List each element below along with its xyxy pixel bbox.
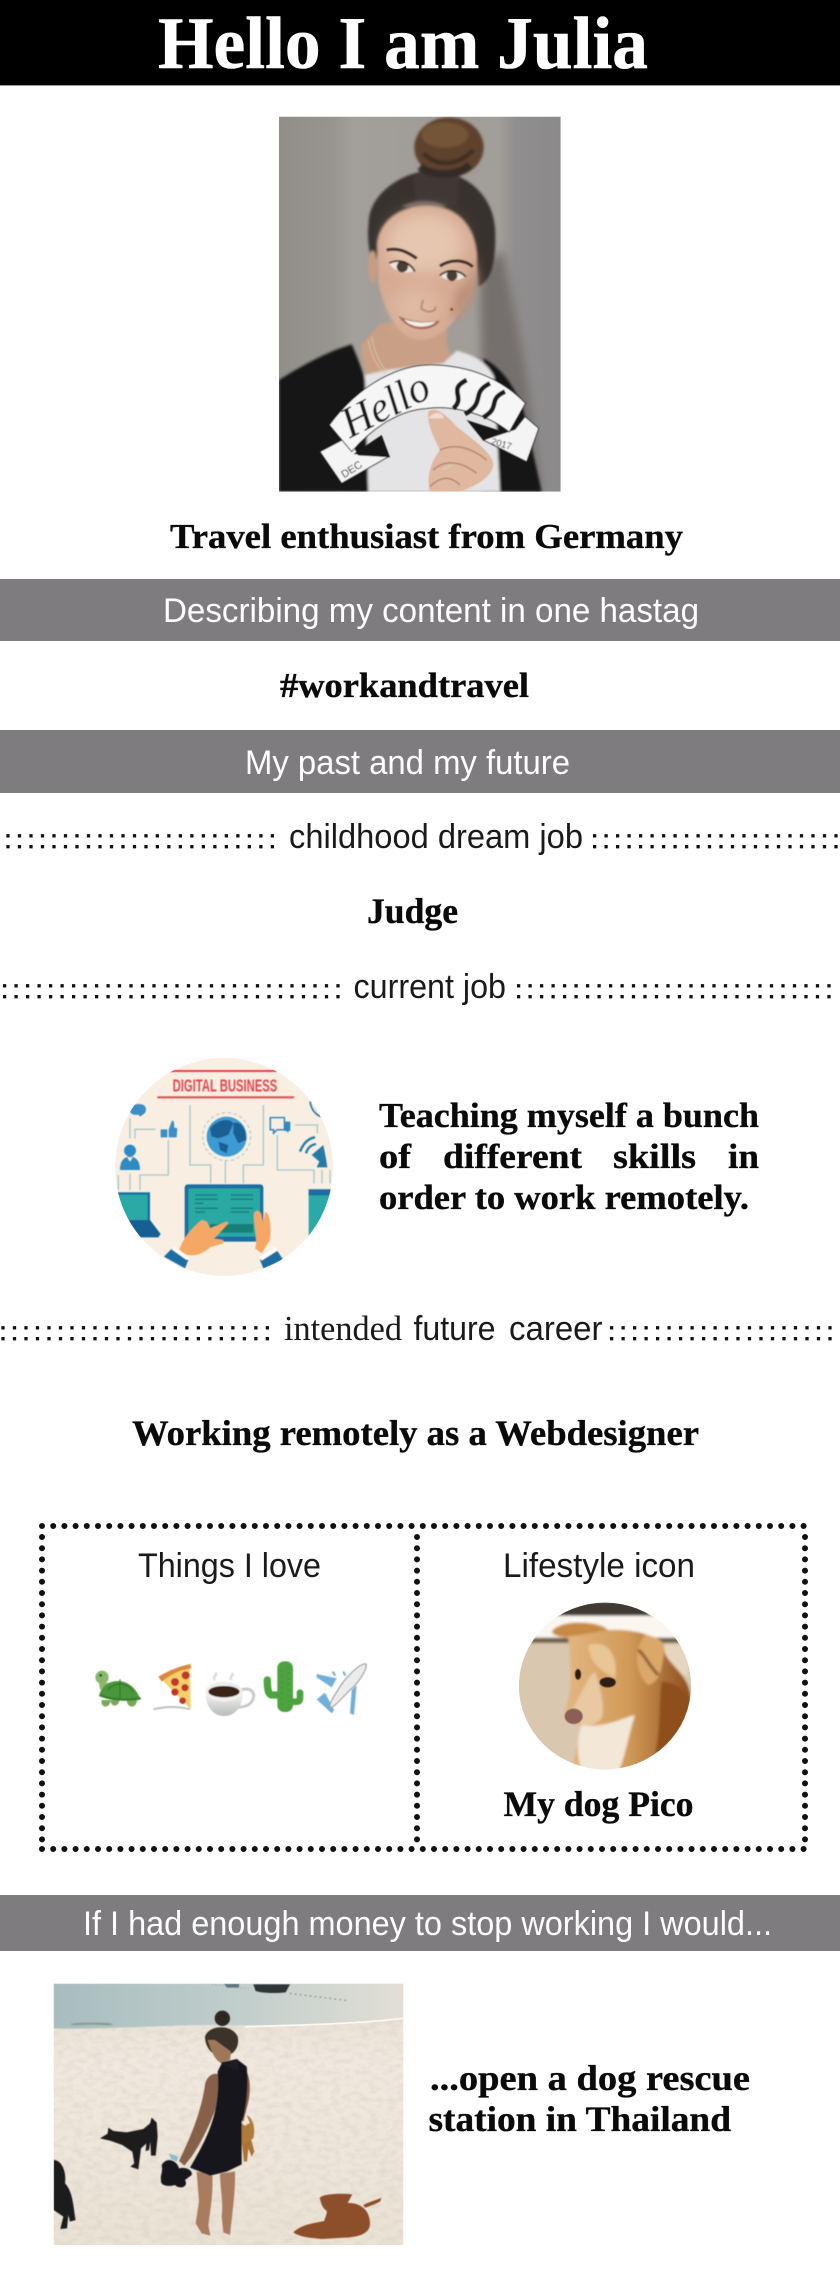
divider label: intended future career: ::::::::::::::::::::: [608, 1316, 838, 1346]
text block: open a dog rescue station in Thailand: [428, 2058, 750, 2139]
text block: current job description: order to work remotely.: [379, 1178, 749, 1217]
divider label: current job: ::::::::::::::::::::::::::::: [515, 974, 837, 1004]
dotted box panel: things I love and lifestyle icon: [42, 1526, 808, 1849]
text block: current job description: [379, 1096, 759, 1217]
icon row: turtle, pizza, coffee, cactus, plane: [95, 1661, 366, 1716]
text block: current job description: of: [379, 1137, 411, 1176]
divider label: childhood dream job: [4, 818, 840, 856]
hashtag: #workandtravel: [280, 666, 529, 705]
divider label: intended future career: career: [509, 1310, 602, 1348]
title banner: Hello I am Julia: [158, 3, 648, 85]
heading: Things I love: Things I love: [138, 1547, 321, 1585]
divider label: childhood dream job: childhood dream job: [289, 818, 583, 856]
section bar: If I had enough money: If I had enough money to stop working I would...: [83, 1905, 772, 1943]
text block: current job description: in: [728, 1137, 759, 1176]
divider label: current job: current job: [354, 968, 506, 1006]
divider label: childhood dream job: ::::::::::::::::::::::::: [4, 824, 280, 854]
answer: Working remotely as a Webdesigner: Working remotely as a Webdesigner: [132, 1413, 699, 1453]
portrait photo of Julia holding a Hello sign: 2017: [490, 436, 513, 452]
text block: open a dog rescue station in Thailand: ...open a dog rescue: [430, 2058, 750, 2098]
text block: open a dog rescue station in Thailand: station in Thailand: [428, 2099, 731, 2139]
divider label: intended future career: future: [414, 1310, 496, 1348]
text block: current job description: Teaching myself a bunch: [379, 1096, 759, 1135]
subtitle: Travel enthusiast from Germany: Travel enthusiast from Germany: [170, 517, 684, 556]
divider label: current job: [1, 968, 837, 1006]
answer: Judge: Judge: [367, 891, 458, 931]
section bar: My past and my future: [0, 730, 840, 793]
text block: current job description: skills: [613, 1137, 696, 1176]
photo: Julia on a Thai beach with dogs: [54, 1984, 403, 2245]
divider label: intended future career: [0, 1309, 838, 1348]
section bar: Describing my content in one hastag: [0, 579, 840, 641]
portrait photo of Julia holding a Hello sign: [279, 117, 561, 492]
photo: dog Pico: [519, 1602, 691, 1770]
divider label: childhood dream job: ::::::::::::::::::::::: [591, 824, 840, 854]
section bar: Describing my content in one hastag: Describing my content in one hastag: [163, 592, 699, 630]
caption: My dog Pico: My dog Pico: [504, 1784, 694, 1824]
section bar: My past and my future: My past and my future: [245, 744, 570, 782]
divider label: current job: ::::::::::::::::::::::::::::::: [1, 974, 346, 1004]
section bar: If I had enough money: [0, 1895, 840, 1951]
portrait photo of Julia holding a Hello sign: DEC: [339, 459, 365, 481]
portrait photo of Julia holding a Hello sign: Hello: [332, 362, 438, 448]
title banner: [0, 0, 840, 86]
divider label: intended future career: intended: [284, 1309, 402, 1348]
icon: digital business illustration: [113, 1058, 335, 1276]
icon: digital business illustration: DIGITAL BUSINESS: [173, 1075, 277, 1095]
text block: current job description: different: [443, 1137, 582, 1176]
heading: Lifestyle icon: Lifestyle icon: [503, 1547, 695, 1585]
divider label: intended future career: ::::::::::::::::::::::::: [0, 1316, 275, 1346]
